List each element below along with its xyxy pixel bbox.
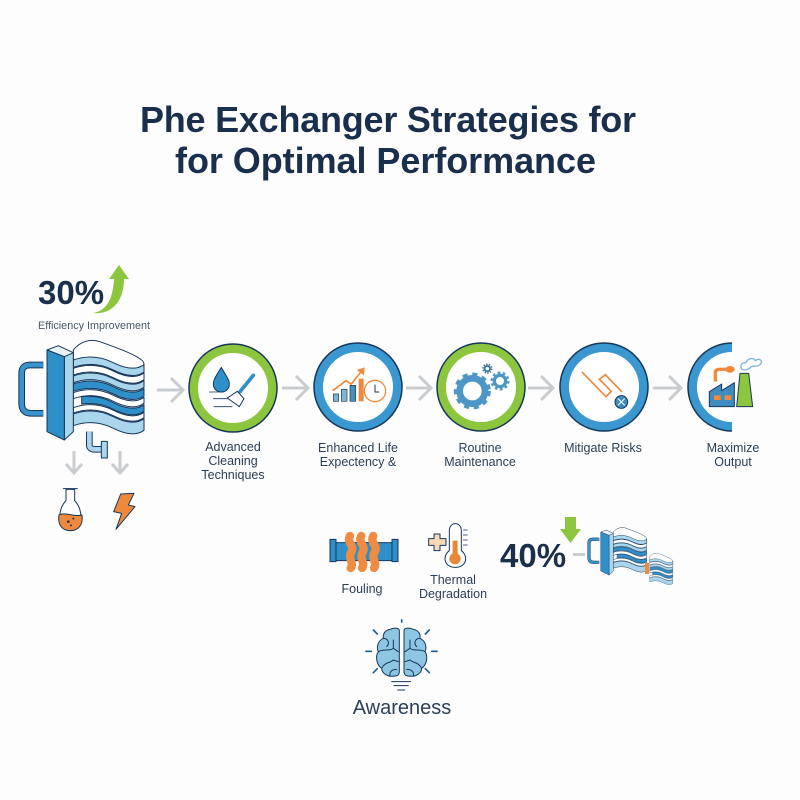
arrow: exchanger to flask bbox=[66, 451, 82, 473]
stat: 30% efficiency improvement: Efficiency Improvement bbox=[38, 320, 150, 332]
icon: green down arrow bbox=[560, 517, 581, 543]
arrow: exchanger to lightning bbox=[112, 451, 128, 473]
dash bbox=[573, 553, 585, 556]
label: awareness: Awareness bbox=[353, 697, 451, 719]
label: thermal degradation: Thermal bbox=[430, 573, 476, 587]
icon: factory and cloud bbox=[709, 359, 761, 407]
stat: 40% reduction bbox=[500, 517, 673, 585]
icon: growth chart and clock bbox=[333, 367, 386, 402]
step: maximize output bbox=[688, 343, 761, 469]
step: enhanced life expectancy: Enhanced Life bbox=[318, 441, 398, 455]
icon: gears bbox=[456, 364, 508, 407]
icon: risk path with valve bbox=[582, 372, 628, 408]
step: mitigate risks bbox=[560, 343, 648, 455]
arrow: to mitigate risks step bbox=[528, 376, 553, 400]
arrow: to maximize output step bbox=[653, 376, 681, 400]
step: advanced cleaning techniques bbox=[189, 344, 277, 482]
title bbox=[140, 99, 636, 181]
icon: flask bbox=[59, 489, 82, 531]
label: thermal degradation bbox=[419, 573, 487, 601]
step: routine maintenance bbox=[437, 343, 525, 469]
step: maximize output: Output bbox=[714, 455, 752, 469]
icon: half ring bbox=[693, 348, 732, 426]
stat: 30% efficiency improvement bbox=[38, 265, 150, 332]
icon: thermometer and plus bbox=[429, 524, 467, 567]
step: advanced cleaning techniques: Advanced bbox=[205, 440, 261, 454]
icon: plate heat exchanger bbox=[22, 340, 144, 458]
label: thermal degradation: Degradation bbox=[419, 587, 487, 601]
icon: green up arrow bbox=[93, 265, 129, 313]
arrow: to life expectancy step bbox=[282, 376, 308, 400]
step: advanced cleaning techniques: Cleaning bbox=[208, 454, 258, 468]
icon: blue ring bbox=[564, 348, 644, 426]
arrow: to routine maintenance step bbox=[406, 376, 431, 400]
icon: orange leak mark bbox=[645, 563, 649, 574]
icon: green ring bbox=[194, 348, 272, 428]
icon: lightning bolt bbox=[114, 493, 135, 529]
step: routine maintenance: Maintenance bbox=[444, 455, 516, 469]
step: mitigate risks: Mitigate Risks bbox=[564, 441, 642, 455]
step: enhanced life expectancy bbox=[314, 343, 402, 469]
icon: fouling pipe bbox=[330, 536, 398, 568]
icon: brain with bulb base bbox=[366, 620, 437, 690]
icon: small exchanger bbox=[589, 528, 647, 575]
stat: 30% efficiency improvement: 30% bbox=[38, 274, 104, 311]
step: maximize output: Maximize bbox=[707, 441, 759, 455]
step: advanced cleaning techniques: Techniques bbox=[201, 468, 265, 482]
title: Phe Exchanger Strategies for bbox=[140, 99, 636, 140]
arrow: to cleaning step bbox=[157, 378, 183, 402]
title: for Optimal Performance bbox=[175, 140, 596, 181]
step: routine maintenance: Routine bbox=[458, 441, 502, 455]
stat: 40% reduction: 40% bbox=[500, 537, 566, 574]
icon: detached plate stack bbox=[650, 553, 673, 585]
label: fouling: Fouling bbox=[342, 582, 383, 596]
icon: blue ring bbox=[318, 348, 398, 426]
step: enhanced life expectancy: Expectency & bbox=[320, 455, 397, 469]
icon: green ring bbox=[442, 348, 520, 426]
icon: drop and brush bbox=[209, 367, 253, 407]
